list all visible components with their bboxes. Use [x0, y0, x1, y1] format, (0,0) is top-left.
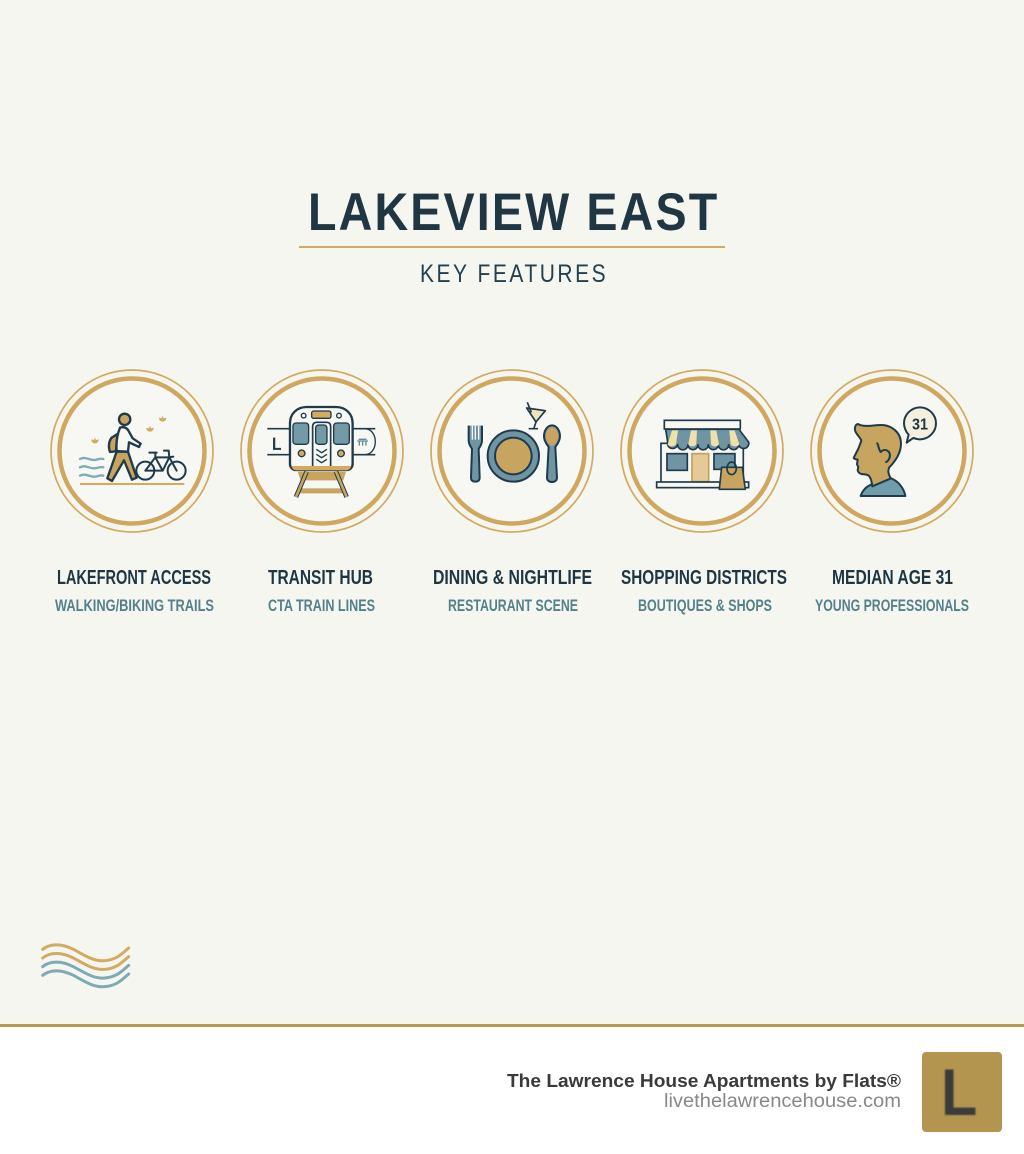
feature: median age — [811, 370, 973, 615]
icon: head profile with age bubble: 31 — [912, 416, 928, 433]
sublabel: cta train lines: CTA TRAIN LINES — [268, 596, 375, 615]
feature: lakefront access — [51, 370, 214, 615]
label: lakefront access: LAKEFRONT ACCESS — [57, 567, 211, 589]
logo tile — [922, 1052, 1002, 1132]
feature: transit hub — [241, 370, 403, 615]
sublabel: young professionals: YOUNG PROFESSIONALS — [815, 596, 969, 615]
icon: storefront with shopping bag — [657, 420, 749, 489]
icon: walker and bicycle by the lake — [80, 414, 186, 485]
badge rings — [431, 370, 593, 532]
logo tile: L — [941, 1056, 977, 1130]
badge rings — [621, 370, 783, 532]
label: transit hub: TRANSIT HUB — [268, 567, 373, 589]
footer website: livethelawrencehouse.com — [664, 1090, 901, 1112]
title: LAKEVIEW EAST — [308, 182, 717, 242]
sublabel: walking/biking trails: WALKING/BIKING TRAILS — [55, 596, 214, 615]
header — [299, 182, 725, 287]
label: dining and nightlife: DINING & NIGHTLIFE — [433, 567, 592, 589]
feature: shopping districts — [621, 370, 787, 615]
sublabel: boutiques and shops: BOUTIQUES & SHOPS — [638, 596, 772, 615]
icon: L train on tracks: L — [272, 435, 281, 454]
icon: L train on tracks — [267, 407, 375, 497]
badge rings — [811, 370, 973, 532]
label: median age 31: MEDIAN AGE 31 — [832, 567, 953, 589]
sublabel: restaurant scene: RESTAURANT SCENE — [448, 596, 578, 615]
badge rings — [51, 370, 213, 532]
decorative waves mark — [43, 945, 129, 987]
footer — [0, 1024, 1024, 1154]
badge rings — [241, 370, 403, 532]
subtitle: KEY FEATURES — [420, 259, 606, 287]
icon: head profile with age bubble — [854, 407, 936, 496]
icon: plate, cutlery and cocktail — [469, 402, 560, 482]
feature: dining and nightlife — [431, 370, 593, 615]
footer brand name: The Lawrence House Apartments by Flats® — [507, 1070, 901, 1091]
label: shopping districts: SHOPPING DISTRICTS — [621, 567, 787, 589]
